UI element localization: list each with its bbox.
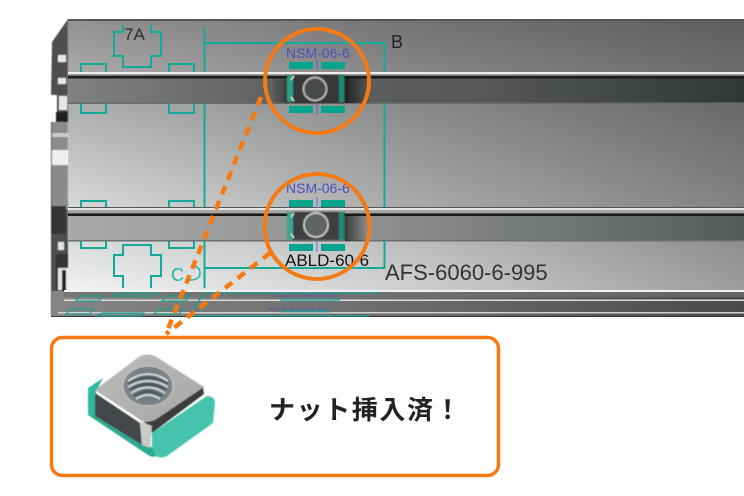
callout text: ナット挿入済！ xyxy=(269,395,462,425)
aluminium frame profile xyxy=(51,19,744,317)
dark left side xyxy=(95,393,142,445)
teal bottom edge xyxy=(88,415,156,457)
bottom band purple marks xyxy=(268,296,340,309)
label: ABLD-60-6: ABLD-60-6 xyxy=(285,251,369,270)
label: B: B xyxy=(391,32,403,52)
inserted nut xyxy=(287,212,345,240)
metal corner xyxy=(140,421,152,448)
left end xyxy=(51,19,68,316)
label: 7A: 7A xyxy=(124,25,145,44)
label: NSM-06-6 upper: NSM-06-6 xyxy=(286,45,350,61)
orange dashed leader lines xyxy=(166,97,270,334)
shadow in slot xyxy=(345,76,371,103)
label: NSM-06-6 lower: NSM-06-6 xyxy=(286,180,350,196)
lower rail xyxy=(68,208,744,210)
lower nut marker xyxy=(285,180,369,270)
threaded hole xyxy=(123,366,173,406)
orange circle: lower nut xyxy=(264,174,370,279)
shadow in slot xyxy=(345,214,369,241)
inserted nut xyxy=(272,75,345,103)
top face xyxy=(95,354,204,422)
bottom band teal marks xyxy=(66,293,380,316)
label: AFS-6060-6-995: AFS-6060-6-995 xyxy=(385,260,548,285)
upper rail xyxy=(68,72,744,74)
teal section mark xyxy=(190,266,200,280)
dark right strip xyxy=(143,387,204,433)
teal projection text: C xyxy=(171,265,184,285)
icon: square nut with teal base xyxy=(88,354,215,458)
teal dimension bars xyxy=(289,200,345,251)
teal drawing outlines xyxy=(81,25,384,288)
teal left sliver xyxy=(88,378,103,417)
upper nut marker xyxy=(272,45,371,115)
teal right foot xyxy=(152,396,215,458)
callout box xyxy=(52,338,498,476)
bottom bands xyxy=(51,291,744,316)
teal dimension bars xyxy=(289,62,345,113)
orange circle: upper nut xyxy=(265,29,369,133)
